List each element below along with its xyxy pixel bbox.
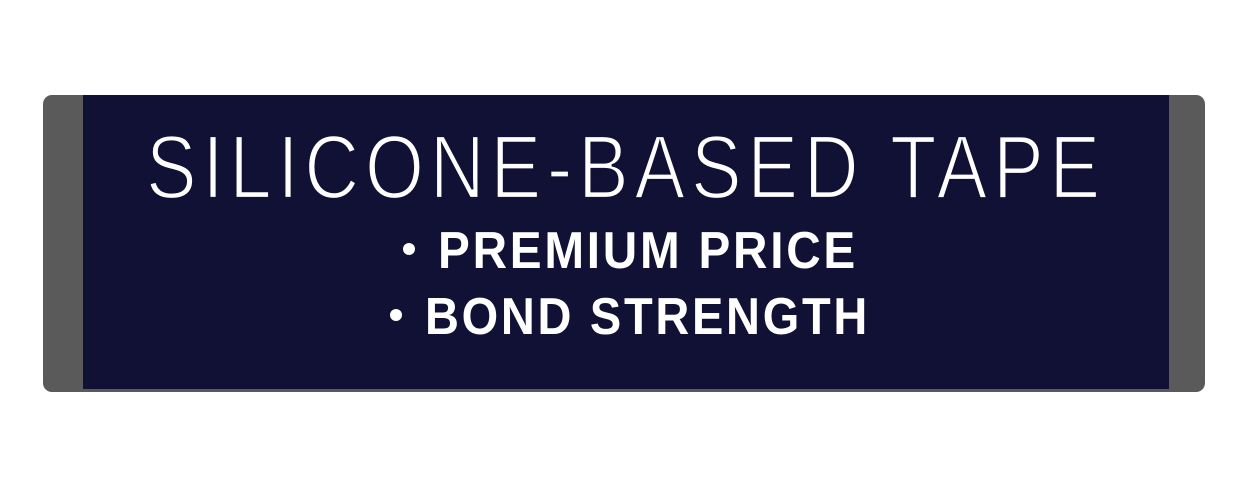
navy centre panel [83, 95, 1169, 389]
bullet: premium price: PREMIUM PRICE [438, 222, 858, 280]
bullet: bond strength: BOND STRENGTH [425, 288, 870, 346]
tape label panel [43, 95, 1205, 392]
grey tape backing with end tabs [43, 95, 1205, 392]
